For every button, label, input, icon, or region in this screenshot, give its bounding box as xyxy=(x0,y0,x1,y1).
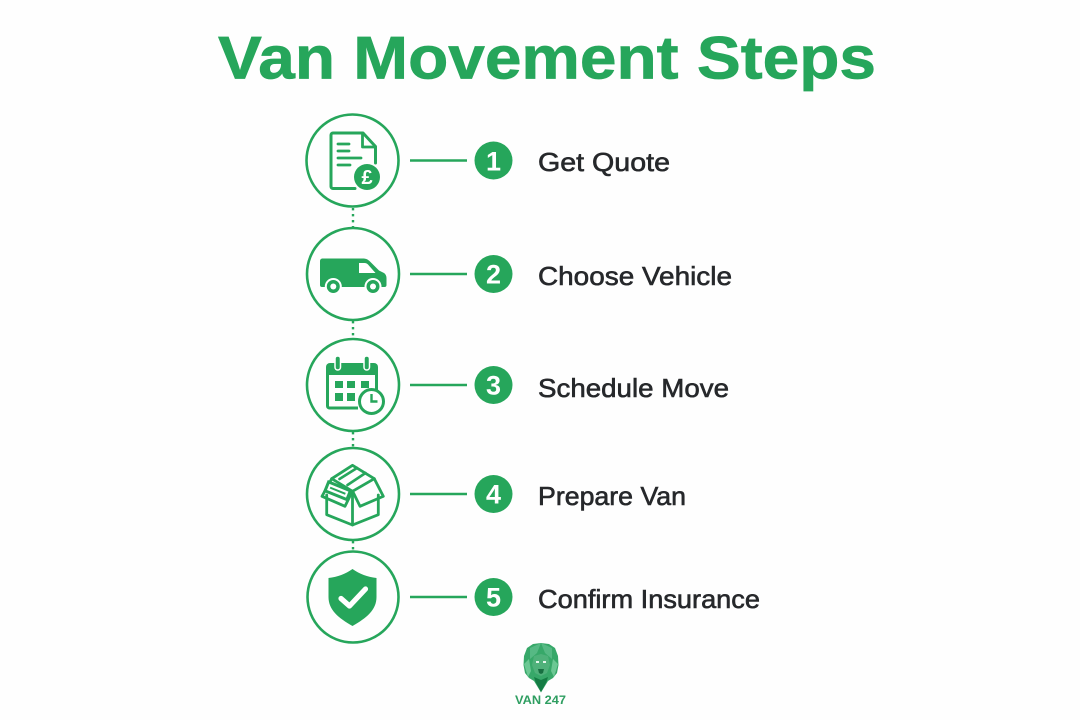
icon: open box xyxy=(307,448,399,540)
number badge 4 xyxy=(474,475,512,513)
connector line 4 xyxy=(410,493,467,495)
label 2: Choose Vehicle xyxy=(538,261,732,291)
icon: document with pound coin xyxy=(306,114,398,206)
step 1: get quote xyxy=(306,114,670,206)
logo wordmark: VAN 247 xyxy=(515,695,566,707)
number badge 1: 1 xyxy=(486,146,501,176)
connector line 5 xyxy=(410,596,467,598)
title: Van Movement Steps xyxy=(218,24,876,92)
logo: van 247 lion xyxy=(515,643,566,707)
connector line 1 xyxy=(410,159,467,162)
number badge 2: 2 xyxy=(486,260,501,290)
icon: calendar with clock xyxy=(307,339,399,431)
number badge 3 xyxy=(474,366,512,404)
step 5: confirm insurance xyxy=(308,552,760,642)
number badge 5 xyxy=(474,578,512,616)
icon: shield with check xyxy=(308,552,398,642)
step 4: prepare van xyxy=(307,448,686,540)
number badge 5: 5 xyxy=(486,582,501,612)
label 3: Schedule Move xyxy=(538,373,729,403)
dotted connectors between step circles xyxy=(352,208,354,552)
number badge 2 xyxy=(474,255,512,293)
connector line 2 xyxy=(410,273,467,275)
step 2: choose vehicle xyxy=(307,228,732,320)
label 5: Confirm Insurance xyxy=(538,584,760,614)
label 4: Prepare Van xyxy=(538,481,686,511)
number badge 1 xyxy=(474,142,512,180)
icon: lion head xyxy=(524,643,558,692)
connector line 3 xyxy=(410,384,467,386)
label 1: Get Quote xyxy=(538,147,670,177)
icon: van xyxy=(307,228,399,320)
number badge 4: 4 xyxy=(486,480,501,510)
icon: document with pound coin: £ xyxy=(361,167,373,189)
number badge 3: 3 xyxy=(486,370,501,400)
step 3: schedule move xyxy=(307,339,729,431)
